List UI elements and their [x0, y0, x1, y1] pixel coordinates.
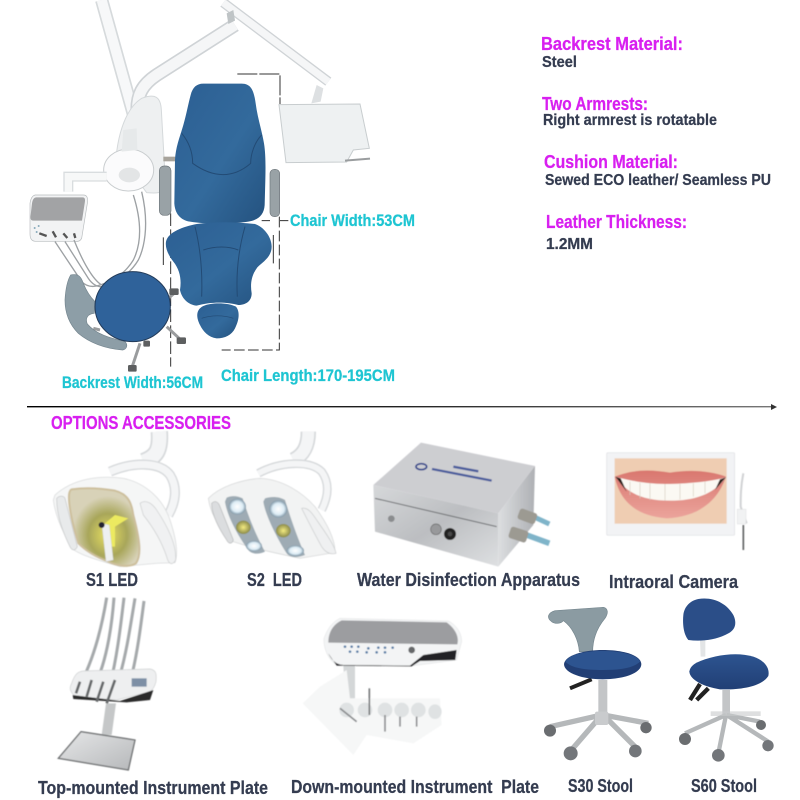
dimension label: chair width: Chair Width:53CM [290, 211, 415, 230]
spec value: thickness: 1.2MM [546, 236, 593, 253]
spec heading: leather thickness: Leather Thickness: [546, 212, 687, 232]
curved support arm [137, 25, 235, 110]
S2 LED lamp [208, 432, 336, 558]
dimension dashes [163, 74, 288, 367]
section divider arrow [27, 404, 777, 410]
main dental chair unit [30, 0, 370, 372]
right armrest [270, 169, 280, 217]
caption: top-mounted instrument plate: Top-mounted Instrument Plate [38, 778, 268, 798]
intraoral camera monitor [607, 453, 747, 550]
doctor stool top view [65, 272, 186, 372]
spittoon bowl [104, 128, 154, 191]
caption: S2 LED: S2 LED [247, 570, 302, 590]
seat cushion [166, 222, 272, 306]
caption: S1 LED: S1 LED [86, 570, 138, 590]
spec value: cushion leather: Sewed ECO leather/ Seamless PU [545, 172, 771, 189]
top-mounted instrument plate [58, 598, 156, 770]
spec heading: cushion material: Cushion Material: [544, 152, 678, 172]
caption: down-mounted instrument plate: Down-mounted Instrument Plate [291, 777, 539, 797]
headrest [197, 303, 239, 338]
S60 stool [679, 599, 774, 762]
down-mounted instrument plate [303, 618, 462, 755]
water disinfection apparatus [373, 443, 549, 567]
caption: S60 stool: S60 Stool [691, 776, 757, 796]
upper instrument arm [223, 3, 328, 103]
dimension label: chair length: Chair Length:170-195CM [221, 366, 395, 385]
dimension label: backrest width: Backrest Width:56CM [62, 373, 203, 392]
instrument console [30, 195, 88, 241]
S1 LED lamp [53, 432, 177, 567]
hoses [55, 192, 146, 287]
left armrest [159, 166, 171, 215]
instrument tray top right [279, 104, 370, 163]
spittoon post [117, 96, 177, 193]
section heading: options accessories: OPTIONS ACCESSORIES [51, 413, 231, 433]
caption: intraoral camera: Intraoral Camera [609, 572, 739, 592]
spec list [541, 34, 771, 253]
spec value: right armrest: Right armrest is rotatable [543, 112, 717, 129]
tray support arm [68, 177, 107, 192]
light pole [102, 0, 137, 128]
S30 stool [544, 607, 652, 760]
spec heading: two armrests: Two Armrests: [542, 94, 648, 114]
spec heading: backrest material: Backrest Material: [541, 34, 683, 54]
caption: S30 stool: S30 Stool [568, 776, 633, 796]
caption: water disinfection apparatus: Water Disinfection Apparatus [357, 570, 580, 590]
backrest [174, 84, 266, 224]
spec value: steel: Steel [542, 54, 577, 71]
